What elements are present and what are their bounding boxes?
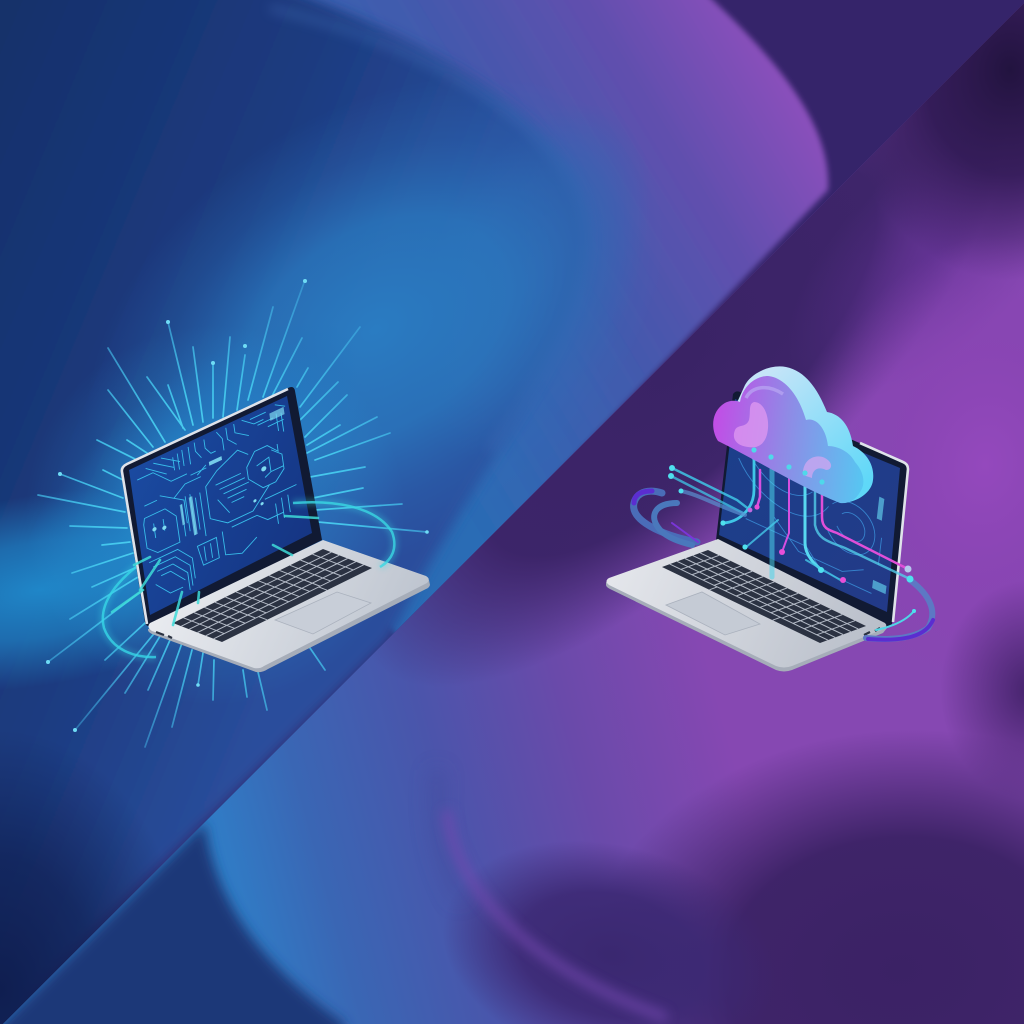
side ports [156, 632, 172, 638]
left laptop with radiating circuit energy [25, 279, 430, 747]
ray end dots [46, 279, 429, 732]
data streams from cloud [671, 450, 910, 581]
left laptop screen [129, 396, 312, 615]
laptop base deck [606, 539, 886, 668]
trackpad [275, 592, 371, 634]
right laptop with cloud [606, 366, 933, 672]
rear swirl ring [103, 557, 156, 657]
cloud rear extrusion [720, 366, 873, 503]
teal energy streaks [112, 516, 318, 625]
data stream nodes [668, 465, 916, 613]
front swirl ring [293, 502, 394, 567]
cloud highlight right [803, 456, 831, 478]
right laptop screen [719, 399, 900, 612]
screen chip blocks [144, 407, 295, 555]
laptop base deck [148, 540, 429, 668]
laptop lid bezel [121, 387, 322, 626]
keyboard [662, 550, 866, 643]
rear swirl arcs [634, 491, 698, 545]
cloud highlight arc [746, 388, 783, 398]
lid silver rim [122, 389, 288, 624]
lid silver rim [860, 443, 908, 622]
screen circuit board traces [136, 400, 304, 606]
cloud highlight left [734, 402, 768, 447]
cloud connector nodes [751, 447, 825, 485]
screen blueprint lines [730, 444, 885, 595]
base front edge [148, 580, 430, 672]
keyboard [173, 549, 372, 642]
screen chip marks [869, 497, 896, 594]
radiating light rays [38, 280, 427, 747]
side ports [864, 628, 880, 635]
cloud front face [713, 376, 863, 503]
base front edge [606, 582, 887, 672]
front swirl arcs [866, 580, 933, 640]
halo glow behind left laptop [25, 325, 405, 705]
laptop lid bezel [716, 391, 908, 628]
trackpad [666, 592, 760, 635]
